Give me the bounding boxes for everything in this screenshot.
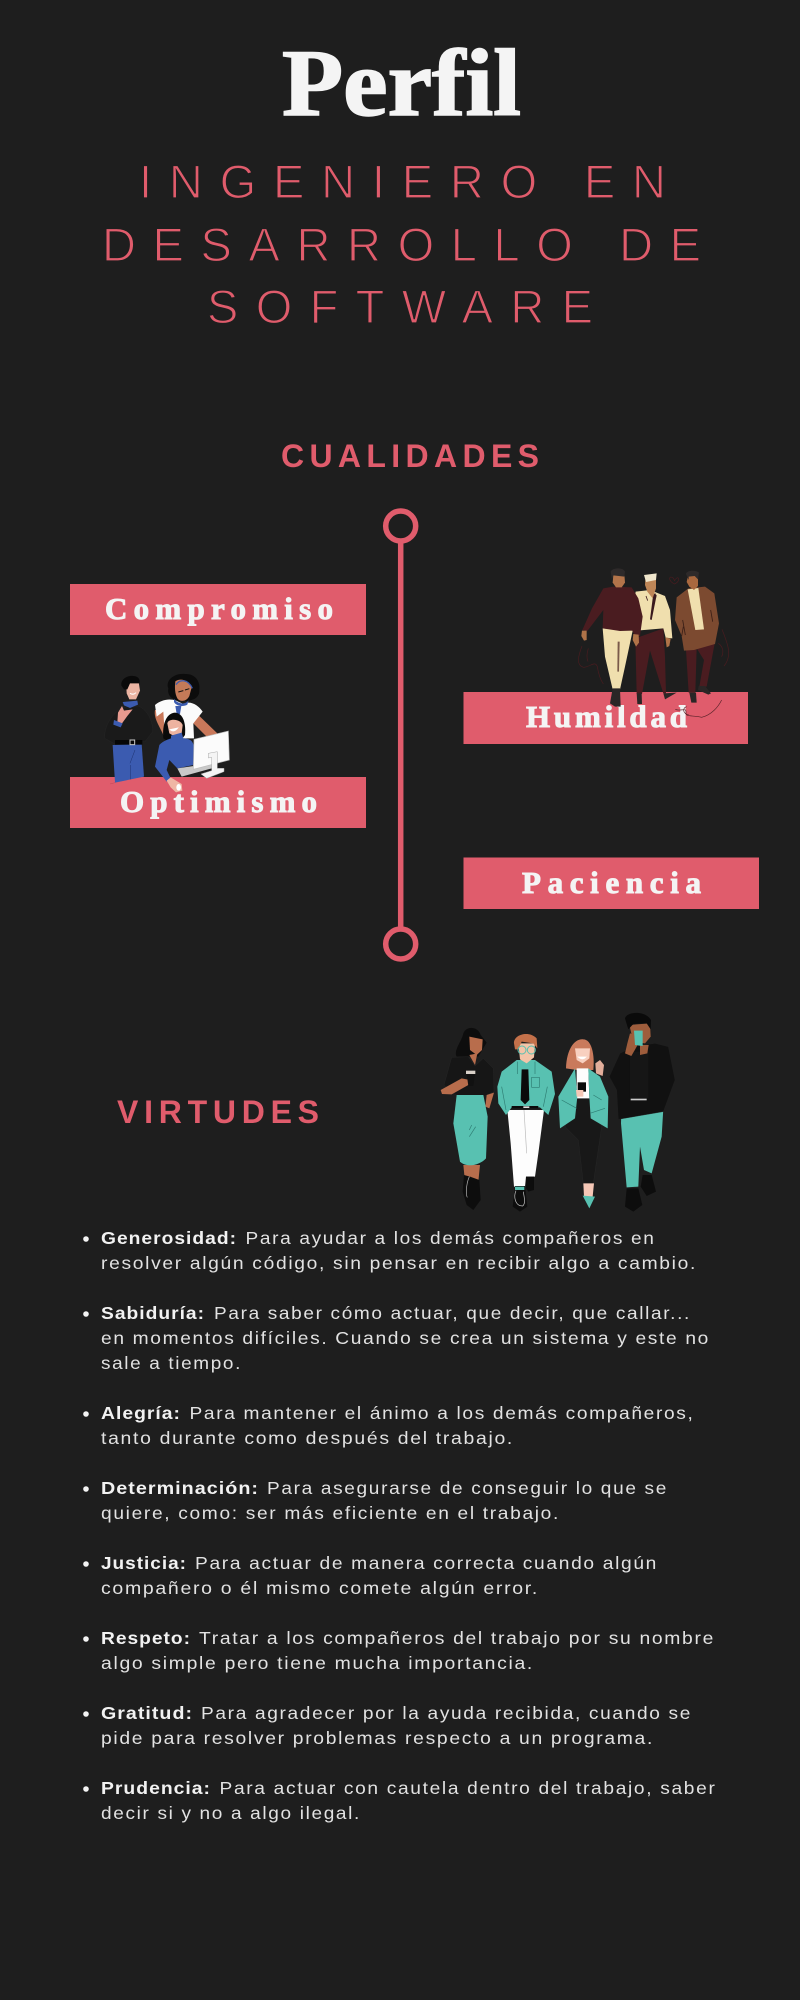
label: Optimismo: Optimismo: [120, 784, 317, 819]
item: Justicia: Para actuar de manera correcta cuando algún: [195, 1553, 658, 1573]
man with tie: [507, 1110, 544, 1187]
item: Justicia: Justicia:: [101, 1553, 187, 1573]
item: Sabiduría: Para saber cómo actuar, que decir, que callar...: [214, 1303, 691, 1323]
woman with cardigan: [565, 1098, 602, 1183]
item: Determinación: Determinación:: [101, 1478, 259, 1498]
item: Prudencia: Para actuar con cautela dentro del trabajo, saber: [220, 1778, 716, 1798]
item: Respeto: Tratar a los compañeros del trabajo por su nombre: [199, 1628, 715, 1648]
item: Determinación: Para asegurarse de conseguir lo que se: [267, 1478, 668, 1498]
item: Generosidad: resolver algún código, sin pensar en recibir algo a cambio.: [101, 1253, 697, 1273]
item: Generosidad: Generosidad:: [101, 1228, 237, 1248]
item: Determinación: quiere, como: ser más eficiente en el trabajo.: [101, 1503, 560, 1523]
squiggles: [578, 577, 729, 684]
item: Gratitud: pide para resolver problemas respecto a un programa.: [101, 1728, 654, 1748]
illustration: three men walking: [578, 568, 729, 717]
timeline: [386, 511, 416, 959]
item: Generosidad: [83, 1228, 697, 1273]
subtitle: SOFTWARE: [207, 280, 593, 333]
middle man: [635, 628, 666, 694]
subtitle: [102, 155, 701, 333]
subtitle: DESARROLLO DE: [102, 218, 701, 271]
item: Respeto: [83, 1628, 715, 1673]
heading: cualidades: CUALIDADES: [281, 438, 539, 474]
illustration: four coworkers walking: [441, 1013, 675, 1212]
item: Alegría: Alegría:: [101, 1403, 181, 1423]
label: Humildad: [464, 692, 748, 744]
heading: virtudes: VIRTUDES: [117, 1094, 319, 1130]
item: Alegría: Para mantener el ánimo a los demás compañeros,: [190, 1403, 694, 1423]
item: Alegría: tanto durante como después del trabajo.: [101, 1428, 514, 1448]
virtues list: [83, 1228, 716, 1823]
front woman: [163, 713, 185, 742]
subtitle: INGENIERO EN: [139, 155, 666, 208]
label: Humildad: Humildad: [526, 699, 687, 734]
man drinking: [621, 1102, 663, 1187]
label: Paciencia: Paciencia: [522, 865, 702, 900]
left man: [105, 706, 153, 744]
item: Alegría: [83, 1403, 694, 1448]
item: Determinación: [83, 1478, 668, 1523]
label: Compromiso: Compromiso: [105, 591, 333, 626]
item: Respeto: Respeto:: [101, 1628, 191, 1648]
back woman: [168, 674, 200, 701]
item: Respeto: algo simple pero tiene mucha importancia.: [101, 1653, 534, 1673]
left man: [603, 628, 633, 689]
item: Prudencia: decir si y no a algo ilegal.: [101, 1803, 361, 1823]
item: Gratitud: [83, 1703, 692, 1748]
item: Sabiduría: Sabiduría:: [101, 1303, 205, 1323]
woman with coffee: [456, 1028, 487, 1057]
item: Justicia: [83, 1553, 658, 1598]
illustration: three coworkers at a computer: [105, 674, 229, 792]
item: Sabiduría: [83, 1303, 710, 1373]
item: Gratitud: Para agradecer por la ayuda recibida, cuando se: [201, 1703, 692, 1723]
right man: [686, 629, 715, 693]
label: Optimismo: [70, 777, 366, 828]
item: Justicia: compañero o él mismo comete algún error.: [101, 1578, 539, 1598]
item: Prudencia: Prudencia:: [101, 1778, 211, 1798]
title: Perfil: [282, 30, 521, 136]
item: Prudencia: [83, 1778, 716, 1823]
item: Gratitud: Gratitud:: [101, 1703, 193, 1723]
item: Generosidad: Para ayudar a los demás compañeros en: [246, 1228, 656, 1248]
label: Compromiso: [70, 584, 366, 635]
item: Sabiduría: en momentos difíciles. Cuando se crea un sistema y este no: [101, 1328, 710, 1348]
item: Sabiduría: sale a tiempo.: [101, 1353, 242, 1373]
label: Paciencia: [464, 858, 759, 909]
